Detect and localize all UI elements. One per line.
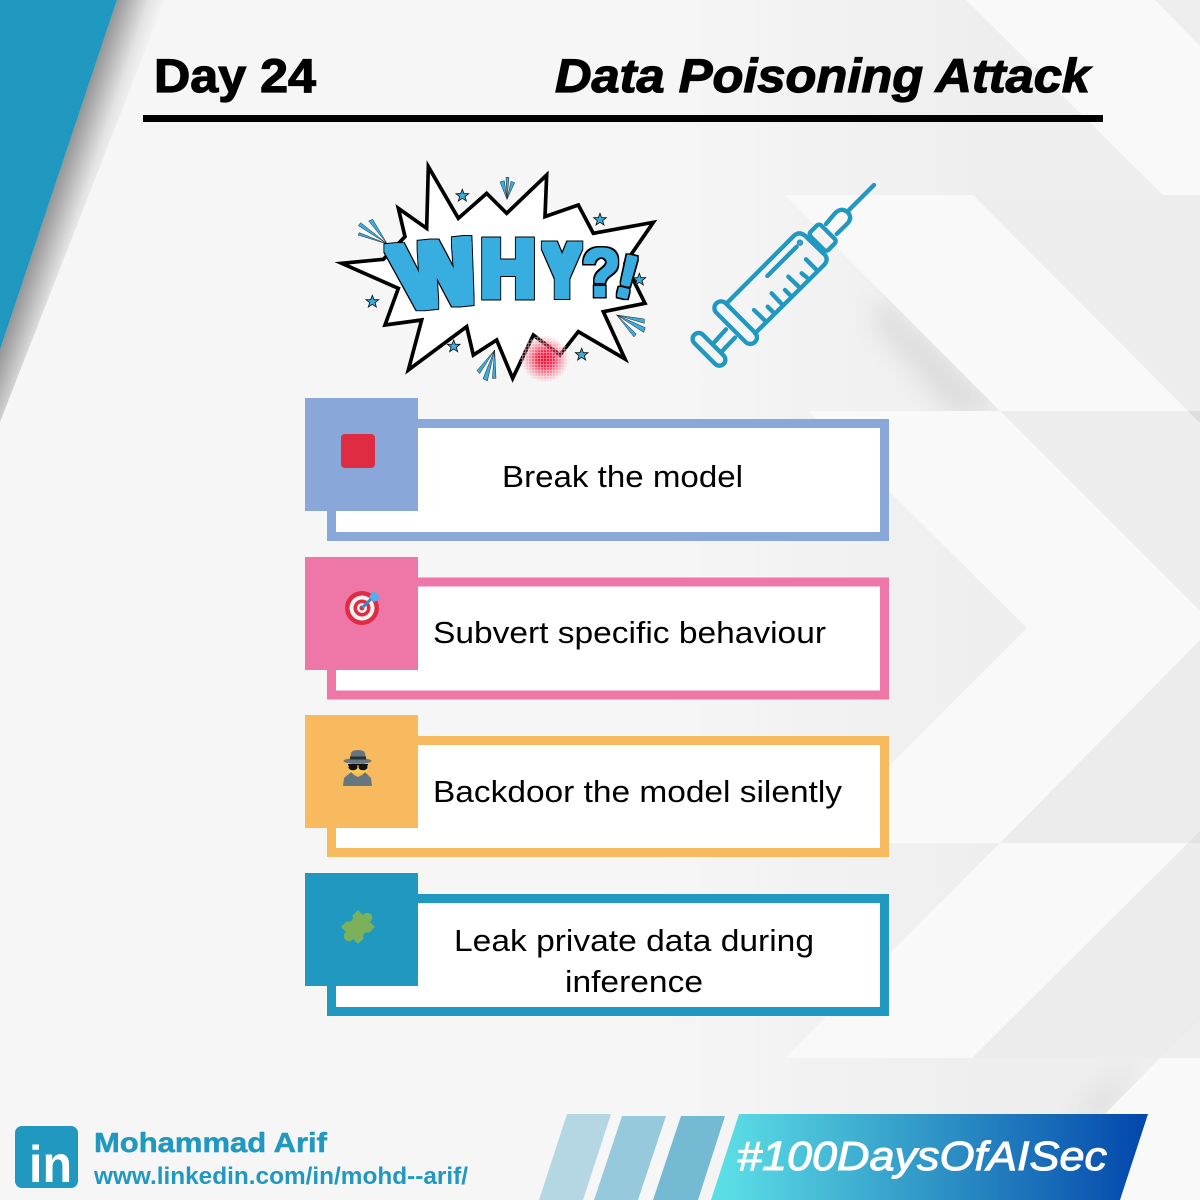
- panel: backdoor the model silently: [305, 715, 884, 852]
- icon: spy: [343, 750, 372, 786]
- hashtag banner: [539, 1114, 1148, 1200]
- burst lettering: ?!: [582, 235, 645, 312]
- title: Day 24: Day 24: [154, 49, 316, 102]
- red halftone spot: [520, 335, 570, 383]
- text: leak private data during inference: inference: [565, 964, 703, 999]
- burst lettering: WHY: H: [481, 223, 536, 313]
- icon: LinkedIn logo: in: [29, 1136, 72, 1194]
- panel: subvert specific behaviour: [305, 557, 884, 695]
- page background: [864, 195, 1200, 1114]
- icon: target with dart: [345, 591, 380, 625]
- burst lettering: WHY: Y: [544, 229, 580, 311]
- profile link text: www.linkedin.com/in/mohd--arif/: [93, 1163, 468, 1190]
- icon: red square: [341, 434, 375, 468]
- icon: syringe: [690, 185, 874, 368]
- author name: Mohammad Arif: [94, 1127, 328, 1158]
- heading underline: [143, 115, 1103, 122]
- icon: LinkedIn logo: [15, 1126, 78, 1194]
- burst lettering: WHY: [382, 220, 580, 327]
- burst lettering: ?!: ?: [582, 235, 621, 310]
- hashtag text: #100DaysOfAISec: [737, 1133, 1108, 1179]
- burst outline: [342, 167, 653, 378]
- burst stars: [366, 189, 646, 360]
- panel: break the model: [305, 398, 884, 536]
- corner accent: blue wedge with shadow: [0, 0, 165, 422]
- icon: puzzle piece: [333, 902, 383, 952]
- burst lettering: WHY: W: [382, 220, 491, 327]
- burst rays: [358, 177, 645, 381]
- illustration: WHY comic burst: [342, 167, 653, 383]
- panel: leak private data during inference: [305, 873, 884, 1012]
- text: subvert specific behaviour: Subvert specific behaviour: [433, 615, 826, 650]
- text: leak private data during inference: Leak private data during: [454, 923, 814, 958]
- text: backdoor the model silently: Backdoor the model silently: [433, 774, 843, 809]
- text: break the model: Break the model: [502, 459, 743, 494]
- burst lettering: ?!: !: [610, 242, 645, 312]
- title: Data Poisoning Attack: Data Poisoning Attack: [555, 49, 1093, 102]
